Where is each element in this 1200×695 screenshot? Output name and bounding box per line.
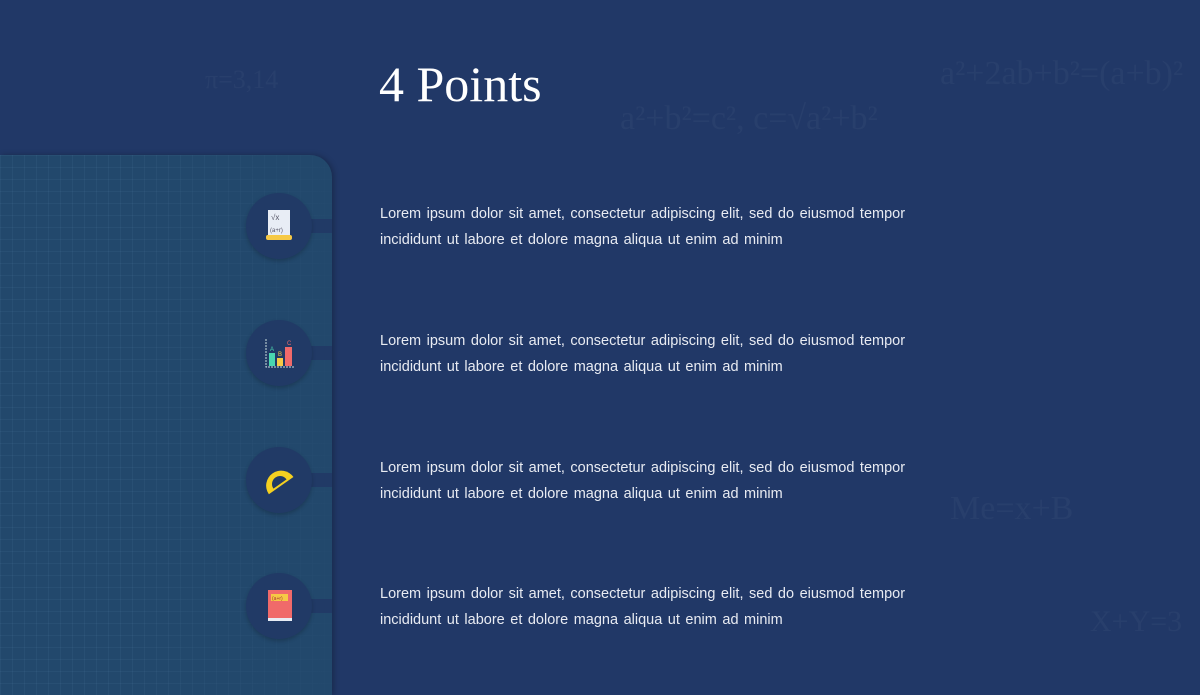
text: a²+b²=c², c=√a²+b² — [620, 100, 878, 137]
point 2 — [246, 320, 905, 388]
icon: bar chart: A — [270, 347, 274, 353]
icon: bar chart: C — [287, 341, 292, 347]
panel: left grid panel — [0, 155, 332, 695]
text: X+Y=3 — [1090, 605, 1182, 638]
point 4 — [246, 573, 905, 642]
text 3: Lorem ipsum dolor sit amet, consectetur adipiscing elit, sed do eiusmod tempor — [380, 460, 905, 476]
icon: protractor — [266, 470, 294, 494]
text: a²+2ab+b²=(a+b)² — [940, 55, 1183, 92]
icon: book: (a+r) — [272, 596, 283, 602]
text 1: Lorem ipsum dolor sit amet, consectetur adipiscing elit, sed do eiusmod tempor — [380, 206, 905, 222]
text 4 — [380, 586, 905, 628]
icon: formula paper: (a+r) — [270, 228, 283, 234]
icon: formula paper: √x — [271, 213, 279, 222]
icon: bar chart — [266, 339, 294, 368]
point 3 — [246, 447, 905, 516]
text 3 — [380, 460, 905, 502]
text: π=3,14 — [205, 65, 278, 94]
text 1: incididunt ut labore et dolore magna aliqua ut enim ad minim — [380, 232, 783, 248]
text 2 — [380, 333, 905, 375]
title: 4 Points — [379, 56, 542, 112]
icon: bar chart: B — [278, 352, 282, 358]
text 2: incididunt ut labore et dolore magna aliqua ut enim ad minim — [380, 359, 783, 375]
icon: book — [268, 590, 292, 621]
text 4: incididunt ut labore et dolore magna aliqua ut enim ad minim — [380, 612, 783, 628]
point 1 — [246, 193, 905, 262]
icon: formula paper — [266, 210, 292, 240]
text 2: Lorem ipsum dolor sit amet, consectetur adipiscing elit, sed do eiusmod tempor — [380, 333, 905, 349]
text: Me=x+B — [950, 490, 1073, 527]
text 3: incididunt ut labore et dolore magna aliqua ut enim ad minim — [380, 486, 783, 502]
text 1 — [380, 206, 905, 248]
text 4: Lorem ipsum dolor sit amet, consectetur adipiscing elit, sed do eiusmod tempor — [380, 586, 905, 602]
